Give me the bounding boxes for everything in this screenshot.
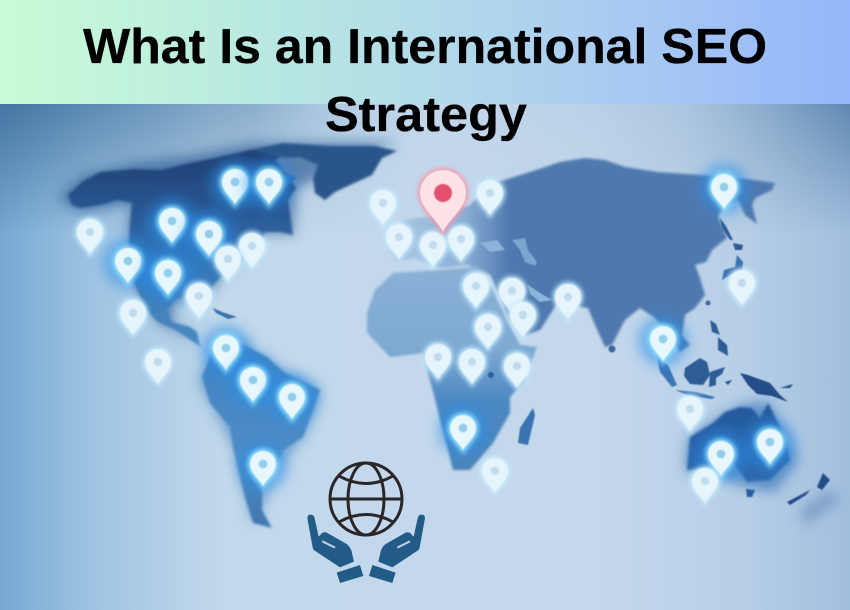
pin: Eastern Europe	[448, 226, 474, 261]
pin: Southern Africa	[438, 405, 488, 455]
icon: hands	[307, 515, 425, 583]
pin: Sudan	[475, 314, 501, 349]
islands and seas	[213, 175, 830, 505]
pin: Russia West	[477, 180, 503, 215]
header band	[0, 0, 850, 104]
title: What Is an International SEO	[83, 20, 767, 74]
pin: Southern Europe	[420, 232, 446, 267]
pin: West Africa	[425, 344, 451, 379]
icon: red location pin	[420, 170, 466, 232]
icon: right hand	[369, 515, 425, 583]
pin: Central Canada	[147, 198, 197, 248]
pin: Eastern Canada	[244, 159, 294, 209]
pin: Australia South	[692, 468, 718, 503]
pin: US West Coast	[103, 238, 153, 288]
pin: Mexico	[120, 300, 146, 335]
pin: Central Africa	[459, 349, 485, 384]
pin: Iceland	[370, 190, 396, 225]
pin: Pacific	[77, 219, 103, 254]
location pins	[77, 159, 795, 503]
pin: Colombia	[201, 325, 251, 375]
Africa	[367, 267, 537, 470]
pin: Canada	[210, 159, 260, 209]
world map	[58, 142, 840, 528]
pin: Pakistan	[555, 284, 581, 319]
pin: Thailand	[638, 316, 688, 366]
pin: Great Lakes	[184, 211, 234, 261]
pin: Pacific South	[145, 349, 171, 384]
pin: Middle East	[499, 278, 525, 313]
pin: Western Europe	[386, 224, 412, 259]
title	[83, 20, 767, 142]
pin: Gulf	[186, 283, 212, 318]
pin: Brazil West	[228, 357, 278, 407]
pin: US South East	[215, 246, 241, 281]
North America	[68, 145, 296, 350]
Europe and Asia	[385, 158, 775, 352]
pin: Brazil East	[267, 374, 317, 424]
land shadow	[58, 142, 840, 525]
Greenland	[250, 143, 397, 200]
icon: globe	[330, 463, 402, 535]
Australia	[687, 403, 790, 482]
South America	[202, 343, 320, 528]
pin: US Central	[143, 250, 193, 300]
title: Strategy	[325, 88, 527, 142]
pin: East Africa	[504, 353, 530, 388]
icon: globe in hands	[307, 463, 425, 583]
pin: Arabia	[510, 302, 536, 337]
pin: Japan	[729, 270, 755, 305]
pin: Indonesia	[677, 396, 703, 431]
pin: Australia East	[745, 419, 795, 469]
pin: Russia East	[699, 164, 749, 214]
pin: Argentina	[238, 441, 288, 491]
pin: North Africa	[463, 273, 489, 308]
pin: South Indian Ocean	[482, 458, 508, 493]
pin: US East Coast	[239, 233, 265, 268]
icon: left hand	[307, 515, 363, 583]
pin: Australia Central	[696, 431, 746, 481]
